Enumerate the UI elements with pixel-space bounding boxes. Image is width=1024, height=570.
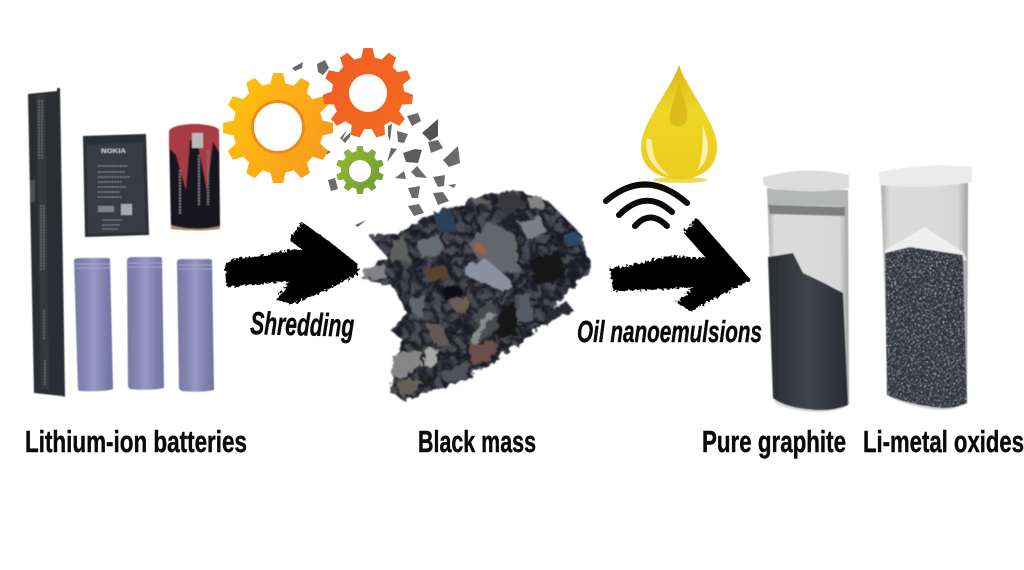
label: black mass: Black mass (418, 424, 536, 459)
phone battery: Nokia: NOKIA (101, 148, 126, 155)
icon: large yellow gear (223, 73, 333, 183)
cylindrical cell 2 (127, 257, 164, 390)
D cell battery (169, 124, 220, 230)
flying shards (292, 60, 460, 227)
icon: oil drop (641, 65, 717, 183)
icon: wifi waves (606, 184, 687, 226)
jar: pure graphite (763, 170, 849, 412)
label: oil nanoemulsions: Oil nanoemulsions (577, 314, 762, 349)
laptop battery (28, 88, 65, 397)
icon: green gear (336, 146, 384, 194)
phone battery: Nokia (83, 134, 149, 237)
jar: Li-metal oxides (879, 165, 972, 410)
label: shredding: Shredding (250, 305, 355, 344)
cylindrical cell 3 (177, 259, 214, 392)
icon: orange gear (322, 48, 414, 138)
label: pure graphite: Pure graphite (702, 424, 846, 459)
panel: lithium-ion batteries (28, 88, 220, 397)
cylindrical cell 1 (74, 258, 113, 391)
panel: black mass (360, 190, 592, 400)
arrow: shredding (225, 222, 359, 304)
label: lithium-ion batteries: Lithium-ion batteries (25, 424, 247, 459)
arrow: oil nanoemulsions (610, 218, 751, 311)
